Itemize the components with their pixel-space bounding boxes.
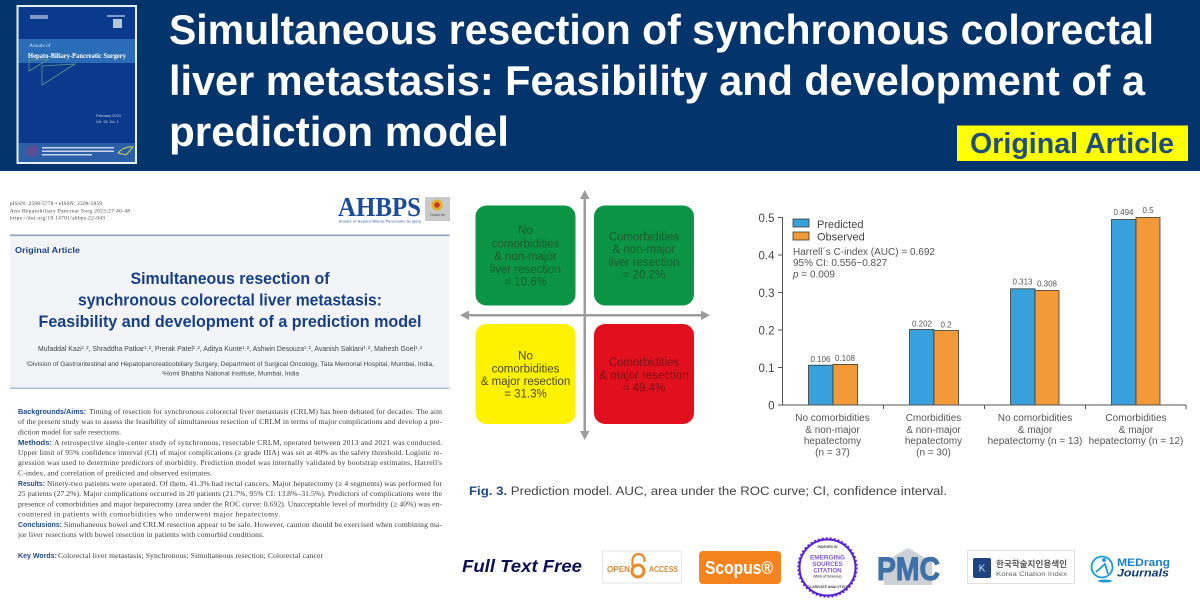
logo: emerging sources citation: CITATION bbox=[813, 568, 842, 574]
category labels: Cmorbidities bbox=[906, 413, 961, 424]
category labels: & major bbox=[1018, 425, 1053, 436]
logo: scopus: Scopus® bbox=[705, 558, 773, 578]
logo: korea citation index bbox=[968, 550, 1074, 584]
logo: emerging sources citation: SOURCES bbox=[812, 561, 843, 568]
bar value labels: 0.2 bbox=[940, 320, 952, 330]
statistics note: Harrell´s C-index (AUC) = 0.692 bbox=[793, 246, 935, 258]
logo: emerging sources citation: CLARIVATE ANALYTICS bbox=[807, 585, 848, 589]
AHBPS logo: Annals of Hepato-Biliary-Pancreatic Surgery bbox=[339, 220, 421, 224]
y axis labels: 0.4 bbox=[758, 250, 775, 262]
statistics note bbox=[792, 246, 935, 280]
quadrant: no comorbidities non-major: No bbox=[518, 225, 533, 237]
abstract text: Methods: bbox=[18, 438, 52, 447]
legend: Predicted bbox=[817, 219, 863, 231]
journal cover: February 2023 bbox=[96, 114, 121, 118]
figure caption: Fig. 3. Prediction model. AUC, area under the ROC curve; CI, confidence interval. bbox=[469, 484, 947, 498]
journal cover: Hepato-Biliary-Pancreatic Surgery bbox=[28, 51, 126, 60]
logo: PMC: PMC bbox=[877, 551, 940, 587]
journal cover bbox=[16, 5, 137, 164]
article title panel: ¹Division of Gastrointestinal and Hepatopancreaticobiliary Surgery, Department of Surgical Oncology, Tata Memorial Hospital, Mumbai, India, bbox=[26, 361, 434, 368]
legend bbox=[793, 219, 865, 244]
quadrant: comorbidities non-major: Comorbidities bbox=[609, 232, 679, 244]
category labels: No comorbidities bbox=[998, 413, 1072, 424]
abstract text: presence of comorbidities and major hepatectomy (area under the ROC curve: 0.692). Unacceptable level of morbidity (≥ 40%) was en- bbox=[18, 500, 442, 508]
bar value labels bbox=[810, 206, 1154, 364]
header banner bbox=[0, 0, 1200, 171]
abstract text: Conclusions: bbox=[18, 520, 62, 529]
paper metadata: https://doi.org/10.14701/ahbps.22-043 bbox=[10, 216, 105, 222]
quadrant: comorbidities major: & major resection bbox=[599, 370, 689, 382]
logo: korea citation index: K bbox=[979, 564, 986, 574]
logo: korea citation index: Korea Citation Index bbox=[996, 571, 1068, 578]
category labels: & non-major bbox=[906, 425, 961, 436]
abstract text: Ninety-two patients were operated. Of them, 41.3% had rectal cancers. Major hepatectomy (≥ 4 segments) was performed for bbox=[47, 479, 442, 488]
category labels: hepatectomy (n = 13) bbox=[988, 436, 1082, 447]
bar chart bbox=[758, 206, 1186, 458]
article title panel: ²Homi Bhabha National Institute, Mumbai, India bbox=[162, 370, 300, 378]
category labels bbox=[795, 413, 1183, 458]
category labels: hepatectomy bbox=[905, 436, 962, 447]
AHBPS logo: AHBPS bbox=[338, 192, 421, 222]
bars bbox=[808, 218, 1160, 405]
full text free label: Full Text Free bbox=[462, 556, 582, 576]
logo: emerging sources citation: (Web of Science) bbox=[813, 574, 842, 578]
statistics note: 95% CI: 0.556−0.827 bbox=[793, 258, 888, 269]
category labels: (n = 30) bbox=[916, 448, 951, 458]
logo: korea citation index: 한국학술지인용색인 bbox=[996, 559, 1067, 569]
category labels: Comorbidities bbox=[1105, 413, 1167, 424]
article title panel: synchronous colorectal liver metastasis: bbox=[78, 292, 382, 310]
title bbox=[169, 6, 1154, 155]
title: liver metastasis: Feasibility and development of a bbox=[169, 57, 1146, 104]
bar value labels: 0.108 bbox=[835, 354, 856, 363]
bar value labels: 0.106 bbox=[810, 355, 831, 364]
logo: emerging sources citation: INDEXED IN bbox=[817, 545, 838, 549]
abstract text: Colorectal liver metastasis; Synchronous; Simultaneous resection; Colorectal cancer bbox=[58, 551, 323, 560]
paper metadata: Ann Hepatobiliary Pancreat Surg 2023;27:40-48 bbox=[10, 208, 130, 214]
risk quadrant diagram bbox=[460, 190, 710, 440]
quadrant: no comorbidities major: = 31.3% bbox=[504, 388, 547, 400]
abstract text: jor liver resections with bowel resection in patients with comorbid conditions. bbox=[17, 530, 264, 539]
journal cover: Annals of bbox=[29, 42, 51, 49]
abstract text: C-index, and correlation of predicted and observed estimates. bbox=[18, 468, 212, 478]
category labels: & non-major bbox=[805, 425, 860, 436]
quadrant: comorbidities non-major: = 20.2% bbox=[623, 270, 665, 282]
quadrant: no comorbidities non-major: = 10.6% bbox=[504, 276, 547, 288]
article title panel: Original Article bbox=[15, 245, 80, 255]
abstract text bbox=[17, 407, 443, 560]
quadrant: no comorbidities non-major: liver resection bbox=[490, 264, 561, 276]
logo: medrang journals: MEDrang bbox=[1117, 557, 1170, 569]
article title panel: Feasibility and development of a prediction model bbox=[38, 313, 422, 331]
category labels: No comorbidities bbox=[795, 413, 870, 424]
abstract text: of the present study was to assess the feasibility of simultaneous resection of CRLM in terms of major complications and develop a pre- bbox=[18, 417, 442, 426]
quadrant: no comorbidities major bbox=[476, 324, 576, 424]
article title panel: Mufaddal Kazi¹˒², Shraddha Patkar¹˒², Prerak Patel¹˒², Aditya Kunte¹˒², Ashwin Desouza¹˒², Avanish Saklani¹˒², Mahesh Goel¹˒² bbox=[38, 344, 423, 353]
logo: emerging sources citation: EMERGING bbox=[810, 554, 845, 562]
AHBPS logo: Check for bbox=[430, 213, 446, 217]
y axis labels: 0.1 bbox=[758, 363, 774, 375]
abstract text: Upper limit of 95% confidence interval (CI) of major complications (≥ grade IIIA) was set at 40% as the safety threshold. Logistic re- bbox=[18, 448, 442, 457]
y axis labels: 0.5 bbox=[758, 213, 774, 225]
abstract text: 25 patients (27.2%). Major complications occurred in 20 patients (21.7%, 95% CI: 13.8%–31.5%). Predictors of complications were the bbox=[18, 489, 443, 498]
y axis labels bbox=[758, 213, 775, 412]
quadrant: comorbidities non-major: liver resection bbox=[609, 257, 679, 269]
quadrant: comorbidities major bbox=[594, 324, 694, 424]
quadrant: no comorbidities non-major: comorbidities bbox=[492, 238, 560, 250]
bar value labels: 0.494 bbox=[1113, 208, 1134, 217]
quadrant: comorbidities non-major: & non-major bbox=[613, 244, 675, 256]
bar value labels: 0.202 bbox=[912, 320, 933, 328]
category labels: hepatectomy (n = 12) bbox=[1089, 436, 1183, 447]
y axis labels: 0 bbox=[768, 400, 774, 412]
logo: emerging sources citation bbox=[798, 538, 857, 597]
quadrant: no comorbidities non-major bbox=[476, 206, 576, 306]
abstract text: Key Words: bbox=[18, 551, 57, 560]
quadrant: comorbidities major: Comorbidities bbox=[609, 357, 679, 369]
paper metadata bbox=[10, 201, 130, 222]
abstract text: gression was used to determine predictors of morbidity. Prediction model was internally validated by bootstrap estimates, Harrell's bbox=[18, 458, 442, 467]
statistics note: p = 0.009 bbox=[792, 270, 835, 280]
quadrant arrows bbox=[460, 190, 710, 440]
title: prediction model bbox=[169, 108, 509, 155]
y axis labels: 0.2 bbox=[758, 326, 774, 338]
paper page bbox=[10, 192, 450, 560]
abstract text: Simultaneous bowel and CRLM resection appear to be safe. However, caution should be exercised when combining ma- bbox=[64, 520, 442, 529]
abstract text: Results: bbox=[18, 479, 45, 488]
logo: scopus bbox=[699, 551, 781, 584]
article title panel: Simultaneous resection of bbox=[130, 270, 330, 288]
journal cover: Vol. 26, No. 1 bbox=[96, 120, 119, 124]
y axis labels: 0.3 bbox=[758, 288, 774, 300]
bar value labels: 0.313 bbox=[1012, 278, 1033, 286]
quadrant: comorbidities major: = 49.4% bbox=[623, 382, 665, 394]
quadrant: no comorbidities major: No bbox=[518, 350, 533, 362]
quadrant: no comorbidities non-major: & non-major bbox=[494, 251, 557, 263]
abstract text: countered in patients with comorbidities who underwent major hepatectomy. bbox=[18, 510, 280, 518]
bar value labels: 0.5 bbox=[1142, 206, 1154, 215]
logo: open access: OPEN bbox=[607, 564, 630, 574]
quadrant: no comorbidities major: & major resection bbox=[481, 376, 570, 388]
quadrant: comorbidities non-major bbox=[594, 206, 694, 306]
category labels: & major bbox=[1119, 425, 1154, 436]
logo: medrang journals bbox=[1092, 556, 1170, 582]
logo: open access bbox=[602, 551, 682, 583]
abstract text: Timing of resection for synchronous colorectal liver metastasis (CRLM) has been debated for decades. The aim bbox=[89, 407, 442, 416]
original article badge: Original Article bbox=[970, 128, 1174, 160]
category labels: (n = 37) bbox=[815, 448, 850, 458]
article title panel bbox=[10, 234, 450, 389]
logo: open access: ACCESS bbox=[649, 564, 678, 574]
paper metadata: pISSN: 2508-5778 • eISSN: 2508-5859 bbox=[10, 201, 102, 207]
chart axes bbox=[778, 217, 1186, 409]
legend: Observed bbox=[817, 232, 865, 244]
abstract text: A retrospective single-center study of synchronous, resectable CRLM, operated between 2013 and 2021 was conducted. bbox=[54, 438, 442, 447]
abstract text: Backgrounds/Aims: bbox=[18, 407, 86, 416]
abstract text: diction model for safe resections. bbox=[18, 428, 121, 436]
category labels: hepatectomy bbox=[804, 436, 861, 447]
quadrant: no comorbidities major: comorbidities bbox=[492, 364, 560, 376]
title: Simultaneous resection of synchronous colorectal bbox=[169, 6, 1154, 53]
logo: medrang journals: Journals bbox=[1117, 568, 1169, 580]
bar value labels: 0.308 bbox=[1037, 280, 1058, 288]
